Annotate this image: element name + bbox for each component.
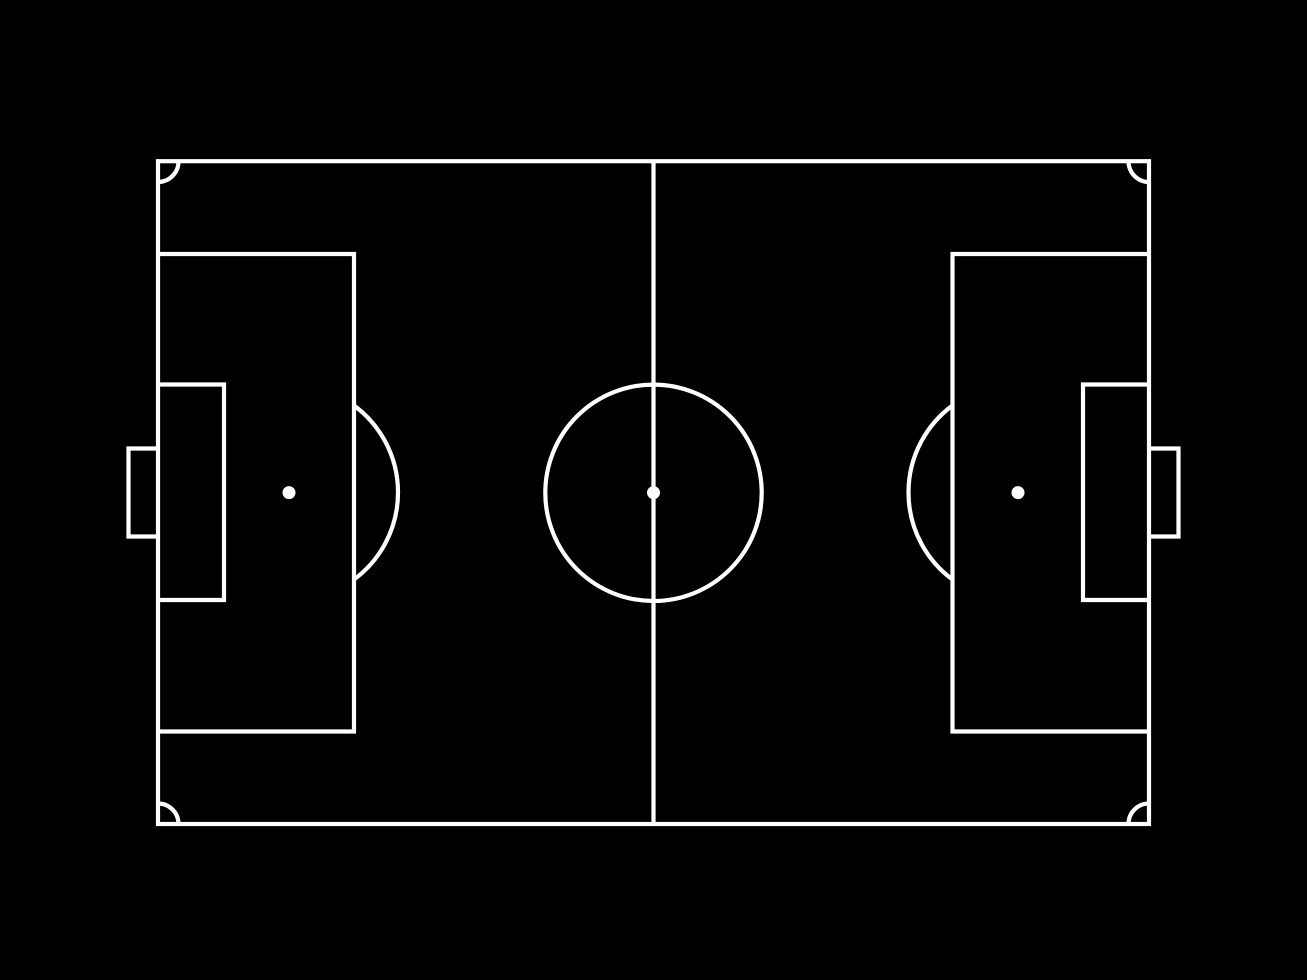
centre spot [647,486,660,499]
top-right corner arc [1128,161,1149,182]
right goal area [1083,384,1149,600]
left penalty area [158,254,354,732]
right penalty spot [1012,486,1024,499]
centre circle [545,385,762,601]
right penalty arc [908,406,952,580]
bottom-left corner arc [158,804,178,824]
left goal area [158,384,224,600]
right goal [1149,448,1178,536]
pitch markings [128,161,1178,824]
bottom-right corner arc [1128,804,1149,824]
pitch boundary [158,161,1149,824]
left penalty spot [282,486,296,499]
left penalty arc [354,406,398,580]
right penalty area [952,254,1149,732]
halfway line [651,161,656,824]
top-left corner arc [158,161,179,182]
left goal [128,448,158,536]
